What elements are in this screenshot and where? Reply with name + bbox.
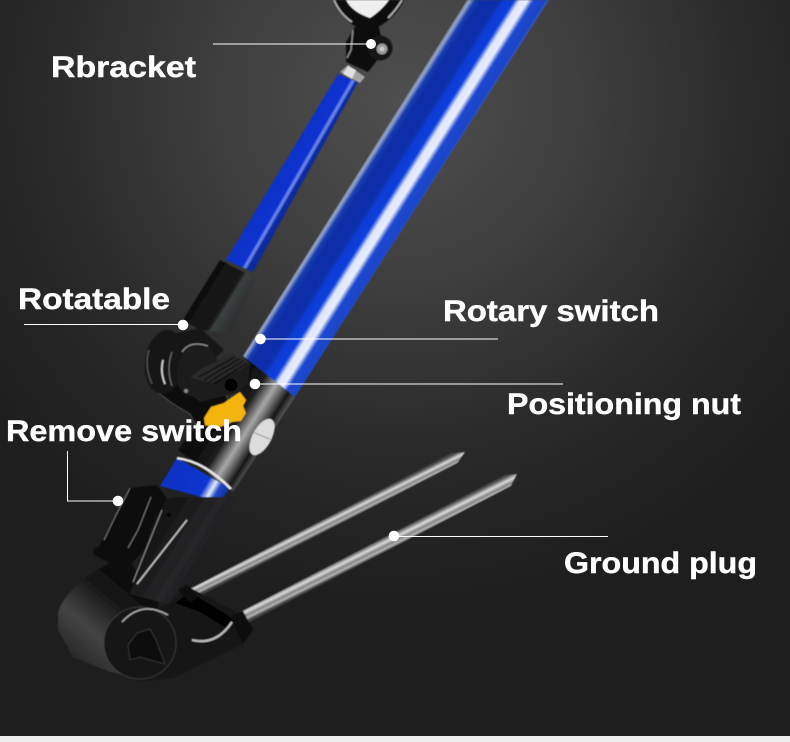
top ring bracket <box>333 0 404 28</box>
callout: Ground plug <box>389 531 757 580</box>
callout: Ground plug: Ground plug <box>564 547 757 580</box>
wheel lock knob <box>128 629 165 664</box>
arm connector <box>183 260 255 333</box>
bottom page strip <box>0 736 790 742</box>
base rear body <box>58 556 160 680</box>
lower blue tube <box>160 458 231 502</box>
pivot wheel <box>104 607 176 679</box>
yellow adjuster gear <box>204 392 246 428</box>
product: rod holder illustration <box>58 0 549 681</box>
callout: Rotatable <box>18 283 188 330</box>
callout: Rotary switch: Rotary switch <box>443 295 659 328</box>
callout: Remove switch: Remove switch <box>6 415 242 448</box>
clamp knob <box>184 354 250 402</box>
base front plate <box>130 497 234 604</box>
oval release button <box>244 415 280 459</box>
main blue tube <box>243 0 549 397</box>
callout: Remove switch <box>6 415 242 506</box>
collar <box>178 356 295 492</box>
callout: Positioning nut <box>250 379 741 421</box>
callout: Rbracket: Rbracket <box>51 51 196 84</box>
thin blue support arm <box>226 74 358 272</box>
ground spike lower <box>242 474 517 623</box>
base latch clip <box>97 485 168 566</box>
callout: Rbracket <box>51 39 376 84</box>
callout: Rotatable: Rotatable <box>18 283 170 316</box>
callout: Rotary switch <box>255 295 659 344</box>
hinge neck <box>168 328 224 372</box>
ground spike upper <box>190 452 465 599</box>
callout: Positioning nut: Positioning nut <box>507 388 741 421</box>
swivel neck <box>340 24 392 83</box>
hinge disk <box>141 328 223 401</box>
spike mount arm <box>112 585 253 681</box>
hinge lower bracket <box>150 370 236 452</box>
